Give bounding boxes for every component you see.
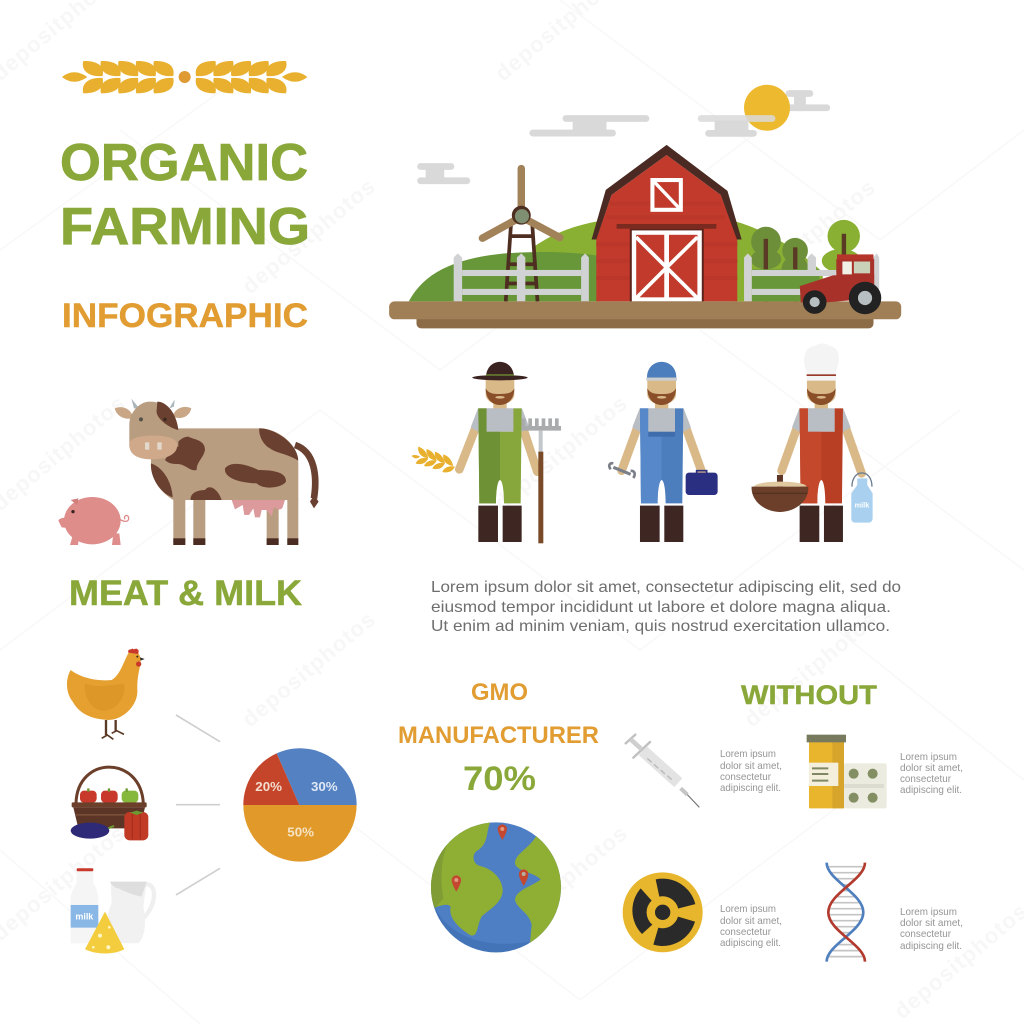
caption: DNA: consectetur	[900, 928, 951, 940]
farmer: blue overalls	[622, 362, 702, 542]
farmer: green overalls	[459, 362, 537, 542]
caption: pills: Lorem ipsum	[900, 751, 957, 763]
heading: GMO manufacturer: 70%	[463, 760, 536, 798]
tool: wrench	[609, 463, 635, 478]
icon: wheat ornament	[62, 61, 307, 93]
caption: pills: consectetur	[900, 773, 951, 785]
icon: radiation	[623, 872, 703, 952]
paragraph: eiusmod tempor incididunt ut labore et dolore magna aliqua.	[431, 599, 891, 616]
caption: DNA: dolor sit amet,	[900, 917, 963, 929]
panel: farmers	[412, 343, 873, 543]
caption: DNA: adipiscing elit.	[900, 940, 962, 952]
caption: DNA	[900, 906, 963, 952]
tool: toolbox	[686, 471, 718, 495]
right fence	[744, 253, 879, 301]
icon: tractor	[800, 254, 881, 314]
title	[60, 134, 310, 256]
wheat in hand	[412, 447, 455, 472]
icon: cow	[115, 399, 319, 545]
caption: syringe	[720, 748, 782, 794]
caption: pills: adipiscing elit.	[900, 784, 962, 796]
pie chart: 50%	[287, 824, 314, 839]
icon: clouds	[417, 90, 830, 184]
watermark text: depositphotos	[739, 607, 882, 732]
caption: syringe: adipiscing elit.	[720, 782, 781, 794]
heading: meat and milk: MEAT & MILK	[69, 574, 302, 613]
icon: windmill	[482, 169, 560, 301]
subtitle: INFOGRAPHIC	[62, 297, 308, 335]
watermark text: depositphotos	[737, 175, 880, 300]
icon: cloud over sun	[698, 115, 775, 137]
milk can: milk	[855, 501, 870, 510]
icon: globe	[431, 822, 561, 952]
pie chart: 20%	[255, 779, 282, 794]
icon: chicken	[67, 648, 145, 739]
caption: syringe: dolor sit amet,	[720, 760, 782, 772]
watermark text: depositphotos	[237, 174, 380, 299]
icon: barn	[592, 145, 742, 301]
caption: syringe: Lorem ipsum	[720, 748, 776, 760]
paragraph: Ut enim ad minim veniam, quis nostrud exercitation ullamco.	[431, 618, 890, 635]
paragraph: Lorem ipsum dolor sit amet, consectetur adipiscing elit, sed do	[431, 579, 901, 596]
panel: farm scene	[389, 85, 901, 328]
connector lines	[176, 715, 220, 895]
caption: radiation: Lorem ipsum	[720, 903, 776, 915]
icon: DNA helix	[827, 863, 865, 962]
icon: pills	[807, 735, 887, 808]
heading: GMO manufacturer: GMO	[471, 679, 528, 706]
left fence	[454, 253, 589, 301]
caption: pills: dolor sit amet,	[900, 762, 963, 774]
watermark text: depositphotos	[489, 391, 632, 516]
pie chart: 30%	[311, 779, 338, 794]
icon: sun	[744, 85, 790, 131]
caption: radiation: consectetur	[720, 926, 771, 938]
icon: dairy: milk	[75, 911, 93, 921]
heading: GMO manufacturer	[398, 679, 599, 798]
pie chart	[243, 748, 357, 862]
hills	[409, 221, 823, 301]
caption: syringe: consectetur	[720, 771, 771, 783]
icon: syringe	[626, 735, 699, 807]
heading: without: WITHOUT	[741, 680, 878, 710]
ground	[389, 301, 901, 328]
tool: rake	[522, 418, 561, 543]
title: ORGANIC	[60, 134, 308, 192]
caption: radiation: dolor sit amet,	[720, 915, 782, 927]
icon: pig	[58, 497, 129, 545]
icon: dairy	[71, 868, 154, 954]
caption: DNA: Lorem ipsum	[900, 906, 957, 918]
paragraph	[431, 579, 901, 635]
title: FARMING	[60, 198, 310, 256]
panel: without icons	[623, 735, 887, 962]
watermark text: depositphotos	[237, 607, 380, 732]
caption: radiation	[720, 903, 782, 949]
heading: GMO manufacturer: MANUFACTURER	[398, 722, 599, 749]
panel: cow and pig	[58, 399, 319, 545]
caption: pills	[900, 751, 963, 796]
trees	[751, 220, 861, 301]
milk can	[851, 473, 873, 523]
icon: vegetable basket	[71, 767, 148, 840]
watermark text: depositphotos	[489, 821, 632, 946]
panel: food sources and pie chart	[67, 648, 357, 954]
farmer: red overalls	[782, 343, 862, 542]
basket of eggs	[752, 475, 808, 512]
caption: radiation: adipiscing elit.	[720, 937, 781, 949]
